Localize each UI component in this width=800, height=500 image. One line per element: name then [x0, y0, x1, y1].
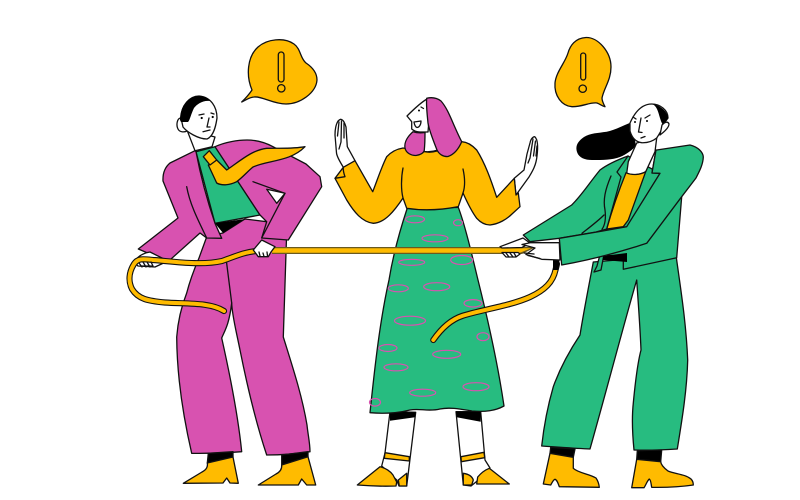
man: neck and head [177, 96, 217, 151]
figure: woman in green suit [523, 104, 703, 488]
woman: blouse [335, 142, 520, 225]
man: trousers [177, 219, 310, 455]
right woman: back hand gripping rope [500, 238, 530, 257]
woman: skirt [370, 207, 504, 413]
rope [130, 247, 560, 340]
jacket body [523, 156, 682, 272]
woman: shoes [357, 467, 509, 486]
rope: left loop [130, 251, 256, 311]
shoes [543, 453, 693, 488]
yellow shirt [607, 172, 646, 229]
woman: pink hair [405, 98, 462, 157]
man: right jacket panel and arm [215, 140, 322, 240]
man: necktie [203, 147, 305, 185]
speech bubble: right exclamation [555, 37, 611, 107]
woman: face [407, 99, 429, 132]
man: left hand [134, 252, 168, 267]
man: left hand fingers [139, 262, 153, 267]
woman: raised left hand [335, 119, 355, 168]
woman: socks [390, 412, 481, 422]
woman: raised right hand [514, 137, 538, 195]
figure: woman in yellow top and green skirt [335, 98, 538, 486]
rope: right tail [433, 260, 560, 340]
man: right hand gripping rope [253, 240, 275, 257]
man: shirt [196, 147, 260, 223]
socks [550, 447, 662, 462]
woman: shoe straps [384, 452, 485, 462]
lapels [607, 150, 660, 229]
neck and face [627, 104, 669, 175]
woman: legs [382, 412, 490, 486]
figure: man in pink suit [134, 96, 322, 485]
speech bubble: left exclamation [242, 40, 317, 104]
woman: skirt pattern [370, 216, 489, 406]
man: socks [207, 452, 308, 465]
man: shoes [183, 457, 316, 485]
right woman: front hand gripping rope [522, 243, 560, 260]
green trousers [542, 255, 688, 450]
rope: horizontal span [272, 247, 536, 254]
long black hair [576, 122, 636, 160]
jacket forward arm [559, 145, 703, 265]
man: belt [215, 219, 245, 233]
woman: neck [424, 125, 438, 152]
man: left jacket panel and arm [138, 151, 222, 262]
